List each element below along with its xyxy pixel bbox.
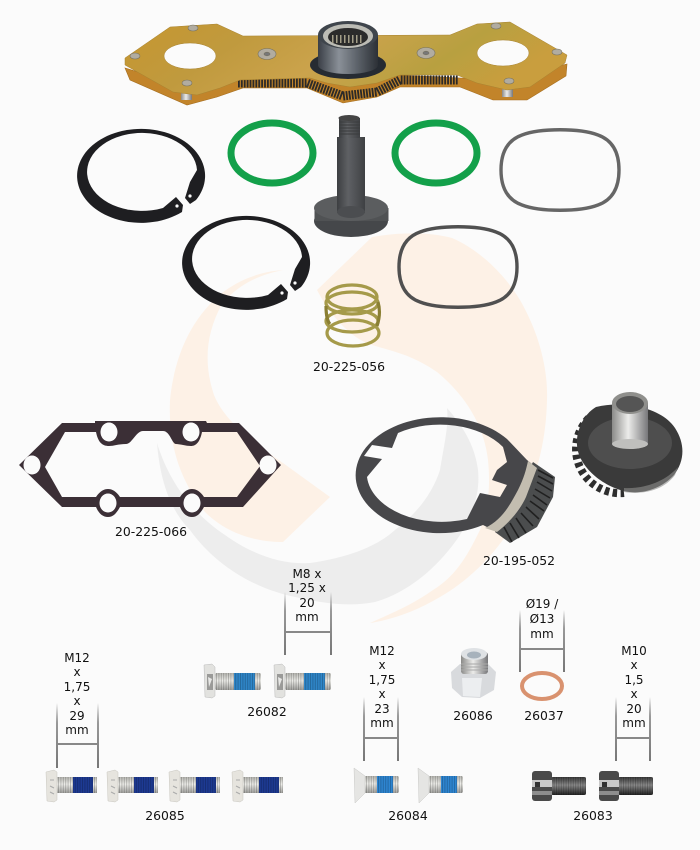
snap ring 1: [77, 129, 205, 223]
rivets: [130, 23, 562, 86]
dimension: 26037: [520, 597, 564, 672]
sector body: [356, 417, 537, 533]
dimension: 26085: 29: [69, 709, 85, 723]
gasket bolt holes: [24, 422, 276, 512]
dimension: 26084: [364, 644, 398, 761]
sector light band: [485, 461, 537, 532]
dimension: 26084: 23: [374, 702, 390, 716]
dimension: 26037: mm: [530, 627, 554, 641]
bolts 26084: [354, 768, 463, 803]
flat gasket: [19, 421, 281, 517]
dimension: 26085: x: [73, 665, 81, 679]
dimension: 26085: [57, 651, 98, 768]
dimension: 26083: [616, 644, 650, 761]
dimension: 26084: M12: [369, 644, 395, 658]
dimension: 26082: 1,25 x: [288, 581, 326, 595]
threaded shaft: [314, 115, 388, 237]
dimension: 26082: mm: [295, 610, 319, 624]
bolts 26085: [46, 770, 283, 802]
part number 26082: 26082: [247, 704, 287, 719]
sector teeth: [495, 462, 555, 543]
wave washer right: [501, 130, 619, 210]
dimension: 26083: x: [630, 658, 638, 672]
bearing: [310, 21, 386, 79]
part number 26086: 26086: [453, 708, 493, 723]
upper plate: [125, 22, 567, 95]
coil spring: [326, 285, 380, 346]
logo watermark: [157, 233, 547, 623]
bolts 26082: [204, 664, 331, 698]
part number 26085: 26085: [145, 808, 185, 823]
plug 26086: [451, 648, 496, 698]
part number 20-195-052: 20-195-052: [483, 553, 555, 568]
dimension: 26082: M8 x: [293, 567, 321, 581]
green seal ring left: [231, 123, 313, 183]
part number 26083: 26083: [573, 808, 613, 823]
dimension: 26082: [285, 567, 331, 655]
copper washer 26037: [522, 673, 562, 699]
dimension: 26083: 1,5: [624, 673, 644, 687]
chain teeth: [238, 80, 458, 96]
dimension: 26083: x: [630, 687, 638, 701]
dimension: 26084: x: [378, 658, 386, 672]
logo swirl: grey crescent: [157, 408, 478, 604]
part number 20-225-066: 20-225-066: [115, 524, 187, 539]
dimension: 26085: 1,75: [64, 680, 90, 694]
steering plate assembly: [125, 21, 567, 105]
bolts 26083: [532, 771, 653, 801]
dimension: 26037: Ø19 /: [526, 597, 559, 611]
dimension: 26083: 20: [626, 702, 642, 716]
logo swirl: left peach blade: [170, 270, 330, 542]
part number 26037: 26037: [524, 708, 564, 723]
dimension: 26037: Ø13: [530, 612, 554, 626]
dimension: 26084: 1,75: [369, 673, 395, 687]
dimension: 26084: mm: [370, 716, 394, 730]
dimension: 26084: x: [378, 687, 386, 701]
green seal ring right: [395, 123, 477, 183]
standoff pins: [181, 86, 513, 100]
toothed sector ring: [356, 417, 555, 543]
wave washer lower: [399, 227, 517, 307]
pinion teeth: [576, 413, 624, 493]
dimension: 26083: M10: [621, 644, 647, 658]
dimension: 26083: mm: [622, 716, 646, 730]
dimension: 26085: M12: [64, 651, 90, 665]
part number 26084: 26084: [388, 808, 428, 823]
logo swirl: right peach blade: [317, 233, 547, 623]
part number 20-225-056: 20-225-056: [313, 359, 385, 374]
lower plate: [125, 64, 567, 105]
pinion body: [577, 405, 682, 492]
dimension: 26085: x: [73, 694, 81, 708]
dimension: 26085: mm: [65, 723, 89, 737]
pinion gear: [576, 392, 682, 493]
dimension: 26082: 20: [299, 596, 315, 610]
pinion hollow shaft: [612, 403, 648, 444]
snap ring 2: [182, 216, 310, 310]
